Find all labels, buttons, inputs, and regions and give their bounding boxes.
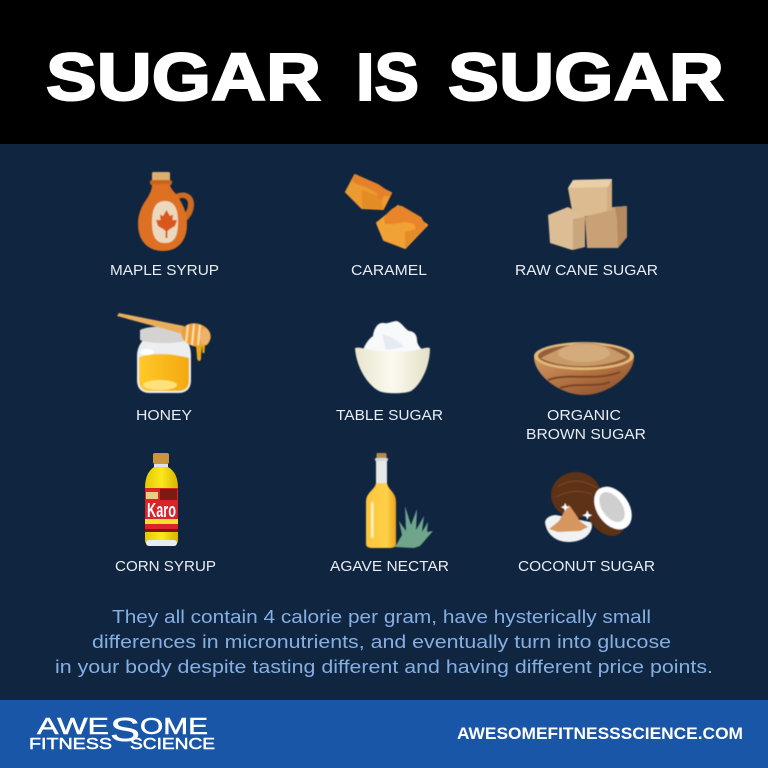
title: SUGAR [448,40,724,115]
logo: SCIENCE [130,736,215,753]
icon: table sugar bowl [355,321,430,393]
label: table sugar: TABLE SUGAR [336,407,443,424]
footer band [0,700,768,768]
label: corn syrup: CORN SYRUP [115,558,216,575]
label: raw cane sugar: RAW CANE SUGAR [515,262,658,279]
icon: agave nectar [366,453,433,548]
title: IS [356,40,419,115]
website url: AWESOMEFITNESSSCIENCE.COM [457,725,743,743]
logo: AWE [37,713,109,739]
summary text: in your body despite tasting different and having different price points. [55,656,713,677]
logo: S [110,711,140,748]
summary text: differences in micronutrients, and eventually turn into glucose [92,631,671,652]
title: SUGAR [46,40,321,115]
icon: raw cane sugar [548,179,627,250]
title [46,40,724,115]
summary text [55,606,713,677]
header band [0,0,768,144]
icon: honey jar [117,313,213,393]
logo: FITNESS [29,736,112,753]
label: caramel: CARAMEL [351,262,427,279]
icon: organic brown sugar bowl [534,342,634,395]
logo: OME [140,713,208,739]
label: organic brown sugar: BROWN SUGAR [526,426,646,443]
icon: coconut sugar [545,472,640,543]
icon: maple syrup [138,172,194,251]
brand name on bottle: Karo [147,500,176,522]
label: maple syrup: MAPLE SYRUP [110,262,219,279]
summary text: They all contain 4 calorie per gram, have hysterically small [112,606,651,627]
label: coconut sugar: COCONUT SUGAR [518,558,655,575]
logo [29,711,215,753]
label: agave nectar: AGAVE NECTAR [330,558,449,575]
label: organic brown sugar [526,407,646,443]
label: organic brown sugar: ORGANIC [547,407,621,424]
icon: caramel [346,174,427,248]
icon: corn syrup bottle [145,453,178,546]
label: honey: HONEY [136,407,192,424]
